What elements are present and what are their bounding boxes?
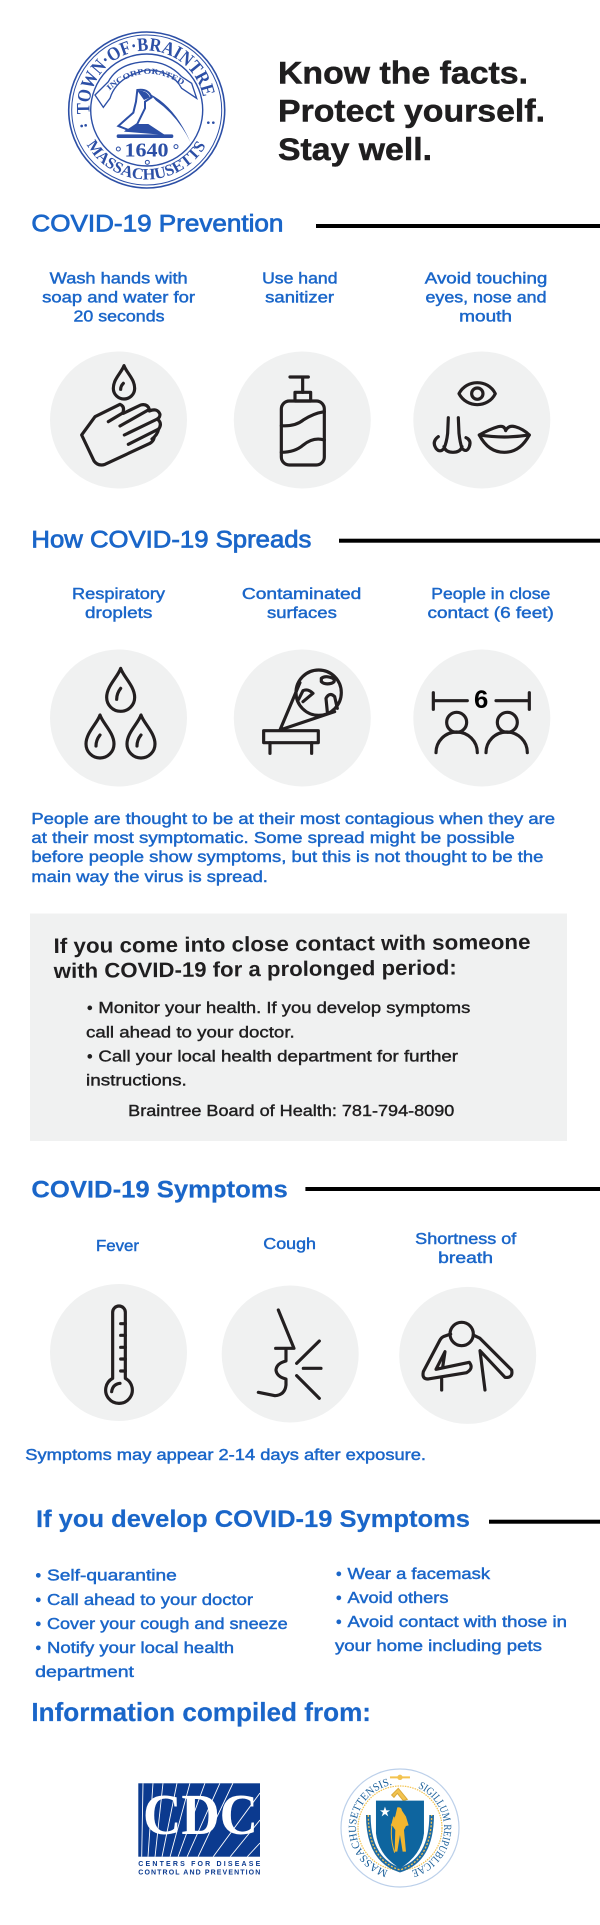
text block: contagion paragraph: before people show symptoms, but this is not thought to be the (31, 849, 544, 866)
text: symptoms onset: Symptoms may appear 2-14 days after exposure. (25, 1447, 426, 1464)
icon: two people 6 feet apart (413, 650, 550, 786)
logo: Massachusetts state seal: MASSACHUSETTENSIS. (348, 1778, 392, 1878)
icon: droplets (50, 650, 187, 786)
list: right actions (335, 1566, 567, 1655)
list: right actions: • (336, 1590, 342, 1607)
label: respiratory droplets: droplets (85, 605, 152, 622)
list: left actions: • (36, 1592, 41, 1609)
logo: Town of Braintree seal: INCORPORATED (106, 68, 184, 90)
list: left actions (35, 1568, 288, 1681)
list: left actions: Call ahead to your doctor (47, 1592, 254, 1609)
label: contaminated surfaces: surfaces (267, 605, 337, 622)
icon: globe on table (234, 650, 371, 786)
label: avoid touching: eyes, nose and (426, 289, 546, 306)
text block: contagion paragraph: main way the virus is spread. (31, 869, 268, 886)
label: wash hands: soap and water for (42, 289, 196, 306)
heading: COVID-19 Prevention: COVID-19 Prevention (31, 211, 283, 238)
label: avoid touching (425, 270, 547, 325)
logo: Massachusetts state seal (340, 1768, 460, 1888)
title: Know the facts. (278, 54, 528, 90)
icon: eye nose mouth (413, 352, 550, 488)
icon: cough (222, 1286, 359, 1422)
label: wash hands: Wash hands with (50, 270, 188, 287)
list: left actions: Self-quarantine (47, 1568, 177, 1585)
heading: How COVID-19 Spreads: How COVID-19 Spreads (31, 527, 311, 554)
panel phone number: Braintree Board of Health: 781-794-8090 (128, 1103, 454, 1120)
list: left actions: • (36, 1640, 41, 1657)
text block: contagion paragraph (31, 811, 555, 886)
label: respiratory droplets: Respiratory (72, 586, 165, 603)
label: cough: Cough (263, 1236, 316, 1253)
logo: CDC: CENTERS FOR DISEASE (138, 1861, 261, 1868)
title: Protect yourself. (278, 93, 545, 129)
panel list: • (87, 1048, 93, 1065)
list: right actions: Wear a facemask (348, 1566, 491, 1583)
label: fever: Fever (96, 1238, 140, 1255)
label: shortness of breath (415, 1231, 517, 1267)
heading: COVID-19 Symptoms: COVID-19 Symptoms (31, 1176, 288, 1204)
icon: thermometer (50, 1284, 187, 1421)
list: left actions: department (35, 1664, 135, 1681)
label: wash hands (42, 270, 196, 325)
label: avoid touching: mouth (459, 308, 512, 325)
icon: hand and water drop (50, 352, 187, 488)
panel list: call ahead to your doctor. (86, 1024, 295, 1042)
panel list: • (87, 1000, 93, 1017)
panel: close contact guidance (30, 914, 567, 1141)
icon: two people 6 feet apart: 6 (474, 686, 488, 714)
label: people in close contact: People in close (431, 586, 550, 603)
list: left actions: • (36, 1616, 41, 1633)
logo: CDC: CONTROL AND PREVENTION (138, 1870, 260, 1876)
logo: CDC: CDC (143, 1782, 258, 1847)
logo: Town of Braintree seal (68, 31, 226, 189)
list: right actions: your home including pets (335, 1638, 542, 1655)
panel list (86, 1000, 470, 1089)
label: shortness of breath: breath (438, 1250, 493, 1267)
list: right actions: Avoid contact with those in (348, 1614, 567, 1631)
list: left actions: Notify your local health (47, 1640, 234, 1657)
logo: Town of Braintree seal: 1640 (124, 140, 168, 162)
heading: Information compiled from: Information compiled from: (31, 1697, 371, 1727)
title (278, 54, 545, 167)
label: respiratory droplets (72, 586, 165, 622)
label: people in close contact (428, 586, 554, 622)
logo: CDC (138, 1782, 261, 1876)
panel heading: If you come into close contact with someone (53, 931, 531, 958)
list: left actions: Cover your cough and sneeze (47, 1616, 288, 1633)
list: right actions: • (336, 1614, 342, 1631)
logo: Massachusetts state seal: SIGILLUM REIPUBLICAE (412, 1782, 452, 1878)
label: hand sanitizer: sanitizer (265, 289, 335, 306)
label: contaminated surfaces: Contaminated (242, 586, 361, 603)
panel heading: with COVID-19 for a prolonged period: (53, 956, 457, 983)
label: wash hands: 20 seconds (74, 308, 164, 325)
panel list: Call your local health department for further (98, 1048, 459, 1065)
icon: sanitizer bottle (234, 352, 371, 488)
heading: If you develop COVID-19 Symptoms: If you develop COVID-19 Symptoms (36, 1506, 470, 1533)
text block: contagion paragraph: People are thought to be at their most contagious when they are (31, 811, 555, 828)
label: hand sanitizer (262, 270, 338, 306)
label: avoid touching: Avoid touching (425, 270, 547, 287)
list: right actions: • (336, 1566, 342, 1583)
text block: contagion paragraph: at their most symptomatic. Some spread might be possible (31, 830, 515, 847)
panel list: Monitor your health. If you develop symptoms (98, 1000, 470, 1017)
label: contaminated surfaces (242, 586, 361, 622)
label: shortness of breath: Shortness of (415, 1231, 517, 1248)
list: right actions: Avoid others (348, 1590, 448, 1607)
panel heading (52, 931, 531, 983)
icon: shortness of breath (399, 1287, 536, 1424)
title: Stay well. (278, 131, 432, 167)
panel list: instructions. (86, 1072, 187, 1089)
label: hand sanitizer: Use hand (262, 270, 338, 287)
label: people in close contact: contact (6 feet) (428, 605, 554, 622)
logo: Town of Braintree seal: MASSACHUSETTS (86, 138, 205, 180)
list: left actions: • (36, 1568, 41, 1585)
